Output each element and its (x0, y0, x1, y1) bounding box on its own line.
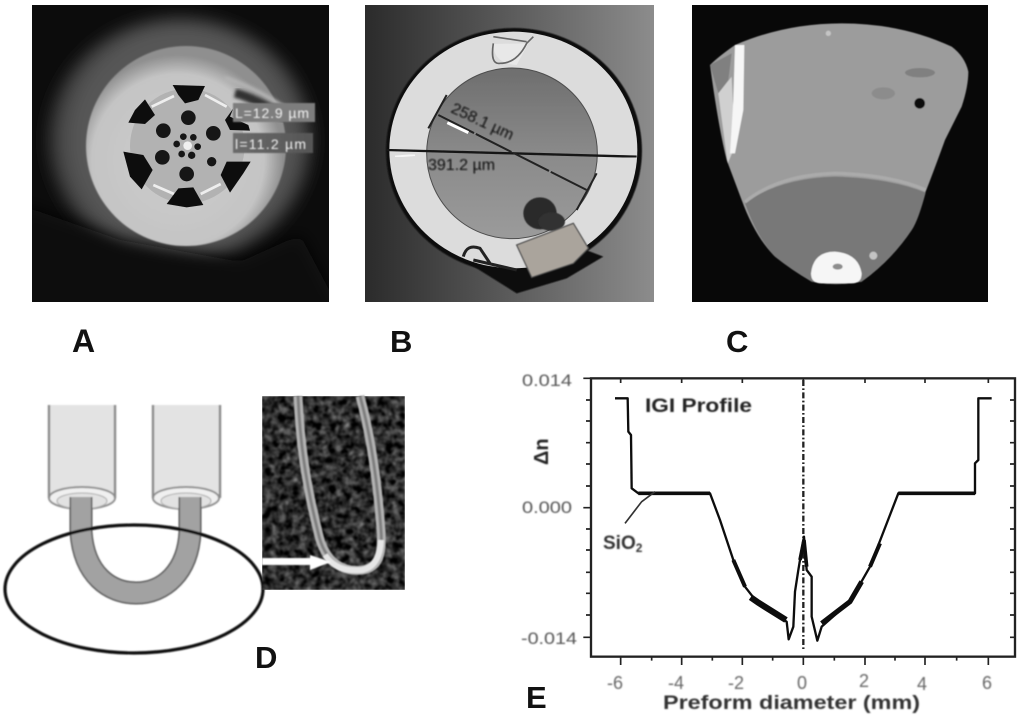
fiber holders (49, 405, 220, 509)
plot frame and ticks (583, 378, 1015, 665)
air holes (155, 110, 221, 181)
x axis tick labels: 2 (859, 671, 869, 691)
x axis title: Preform diameter (mm) (663, 693, 920, 714)
label A: A (72, 323, 95, 359)
panel B: hollow fiber cross-section (365, 5, 654, 302)
panel A: fiber cross-section micrograph (32, 5, 329, 302)
x axis tick labels (607, 671, 992, 694)
label D: D (255, 640, 277, 675)
U-shaped tube (81, 497, 190, 593)
y axis tick labels: -0.014 (521, 630, 577, 648)
label C: C (726, 324, 748, 359)
measurement labels (235, 105, 309, 152)
x axis tick labels: -2 (728, 673, 744, 693)
label E: E (526, 680, 547, 715)
center dashed line (800, 380, 807, 650)
label B: B (390, 324, 412, 359)
ellipse outline (5, 525, 263, 653)
outer body (710, 23, 968, 284)
x axis tick labels: 0 (797, 673, 807, 693)
y axis tick labels: 0.014 (522, 372, 572, 390)
panel E: refractive index profile chart (521, 372, 1015, 715)
y axis title: Δn (531, 438, 553, 465)
air-hole wedges (123, 85, 251, 207)
y axis tick labels (521, 372, 577, 648)
measurement labels: l=11.2 µm (235, 136, 306, 152)
panel D: U-shaped fiber diagram (5, 396, 405, 675)
panel C: fiber preform section (692, 5, 988, 302)
measurement labels: L=12.9 µm (235, 105, 309, 121)
IGI profile curve (615, 398, 992, 641)
y axis tick labels: 0.000 (522, 499, 572, 517)
profile title: IGI Profile (645, 396, 752, 417)
arrow (262, 555, 331, 570)
measurement: outer diameter: 391.2 µm (428, 157, 495, 174)
SiO2 pointer (625, 492, 655, 523)
measurement: inner diameter: 258.1 µm (448, 100, 516, 144)
x axis tick labels: 6 (982, 673, 992, 693)
SiO2 label: 2 (636, 541, 643, 555)
x axis tick labels: -4 (668, 673, 684, 693)
SiO2 label: SiO (603, 533, 636, 554)
x axis tick labels: 4 (917, 674, 927, 694)
inset micrograph (262, 396, 405, 590)
x axis tick labels: -6 (607, 673, 623, 693)
